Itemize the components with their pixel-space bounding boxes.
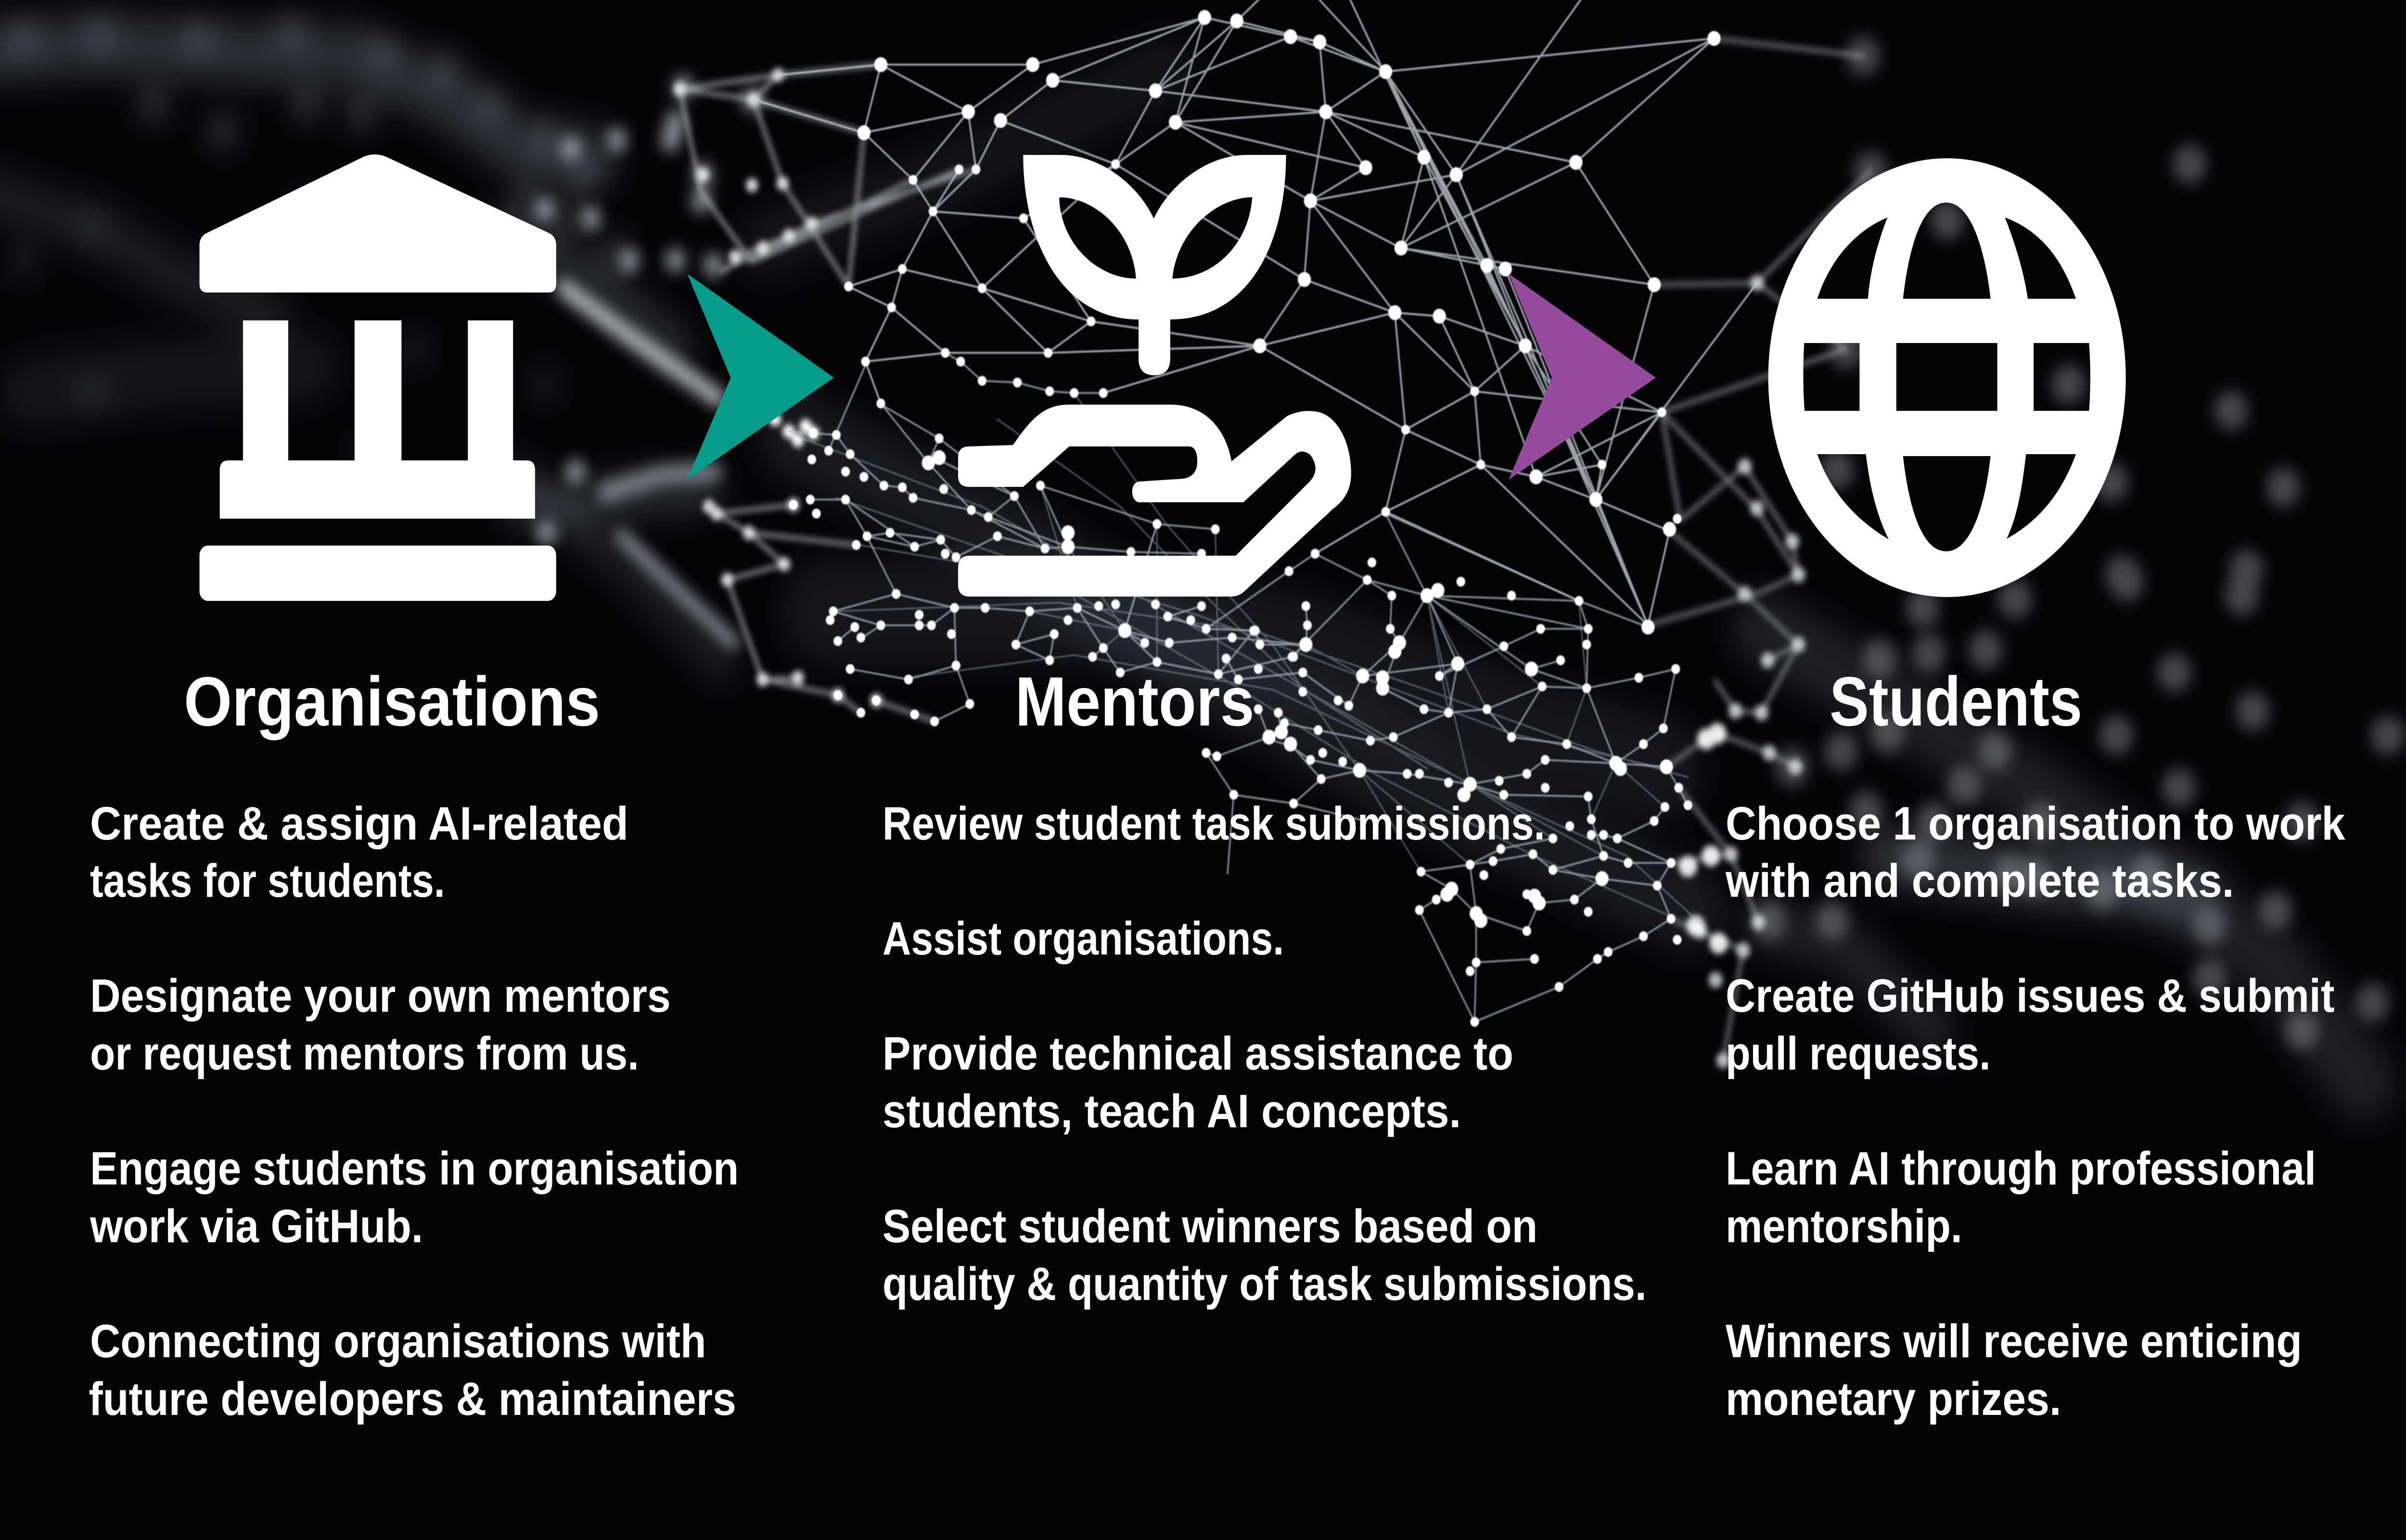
text block: mentors [883, 798, 1647, 1310]
text block: mentors: Assist organisations. [883, 913, 1284, 965]
text block: organisations: work via GitHub. [90, 1200, 423, 1252]
haze under the sharp streams [798, 437, 1688, 908]
mid blurred bands [545, 56, 2388, 1031]
text block: students: mentorship. [1726, 1200, 1962, 1252]
arrow: teal [687, 274, 834, 480]
sweeping stream lines [798, 393, 1703, 926]
background network image [0, 0, 2388, 1083]
icon: globe [1768, 158, 2126, 597]
text block: organisations: Designate your own mentors [90, 970, 671, 1022]
network lines, lower [789, 353, 1688, 1022]
heading: Mentors: Mentors [1015, 662, 1254, 740]
network nodes, small [793, 164, 1688, 1022]
text block: organisations: future developers & maintainers [89, 1373, 736, 1425]
text block: organisations: Connecting organisations with [90, 1315, 706, 1367]
text block: students [1725, 798, 2345, 1425]
sharp central network [754, 0, 1757, 1022]
text block: students: with and complete tasks. [1725, 855, 2234, 907]
text block: students: Learn AI through professional [1726, 1143, 2316, 1195]
haze on the right [1765, 629, 2363, 1083]
left blurred network [0, 31, 2363, 1083]
network nodes, large [864, 17, 1714, 920]
near right blurred network [680, 38, 1870, 1060]
text block: organisations: Engage students in organisation [90, 1143, 739, 1195]
text block: organisations: or request mentors from us. [90, 1028, 639, 1080]
text block: organisations: tasks for students. [90, 855, 445, 907]
text block: organisations [89, 798, 739, 1425]
text block: students: Winners will receive enticing [1726, 1315, 2302, 1367]
text block: students: Choose 1 organisation to work [1726, 798, 2345, 850]
text block: mentors: Review student task submissions. [883, 798, 1545, 850]
text block: students: Create GitHub issues & submit [1726, 970, 2335, 1022]
text block: organisations: Create & assign AI-related [90, 798, 628, 850]
text block: students: monetary prizes. [1726, 1373, 2061, 1425]
text block: mentors: Select student winners based on [883, 1200, 1537, 1252]
text block: mentors: quality & quantity of task submissions. [883, 1258, 1647, 1310]
text block: mentors: Provide technical assistance to [883, 1028, 1513, 1080]
text block: students: pull requests. [1726, 1028, 1991, 1080]
icon: plant in hand [958, 155, 1351, 597]
heading: Organisations: Organisations [184, 662, 600, 740]
icon: institution building [200, 154, 556, 601]
arrow: purple [1509, 274, 1656, 480]
heading: Students: Students [1830, 662, 2082, 740]
text block: mentors: students, teach AI concepts. [883, 1085, 1461, 1137]
network lines, upper [754, 0, 1757, 625]
